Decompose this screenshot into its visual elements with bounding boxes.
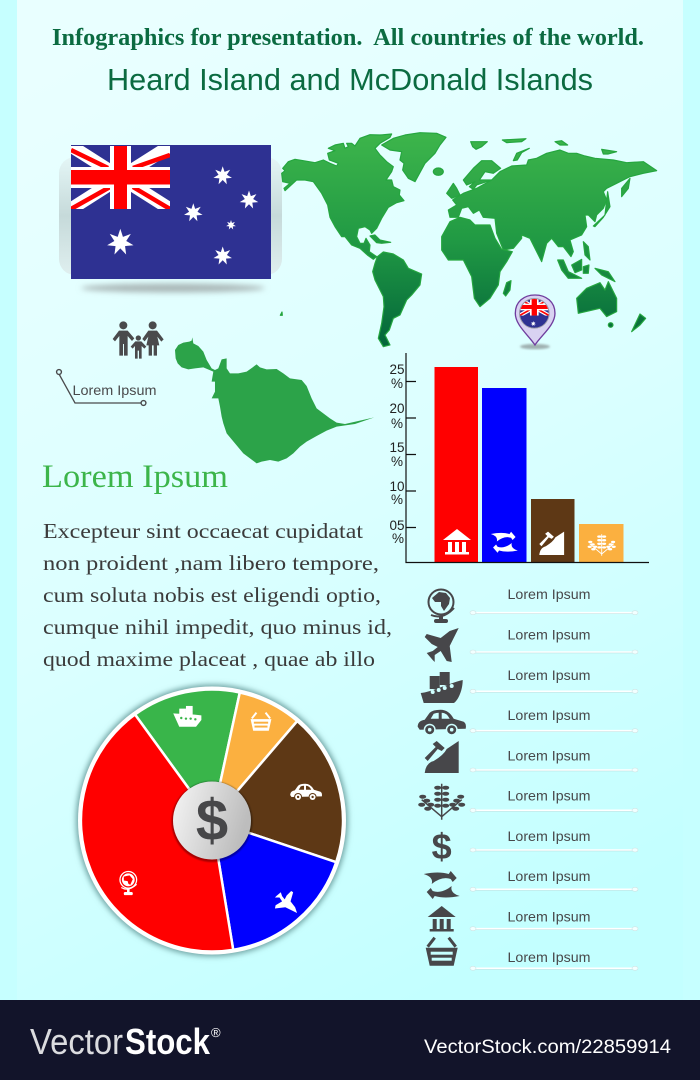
stars <box>107 166 258 265</box>
location pin <box>515 295 555 349</box>
axis labels: % <box>391 492 403 507</box>
title: tagline: Infographics for presentation. All countries of the world. <box>52 25 644 51</box>
legend row: mining: Lorem Ipsum <box>508 748 590 764</box>
axis labels: % <box>392 531 404 546</box>
icon: basket on slice <box>251 713 271 731</box>
legend row: car <box>418 708 638 736</box>
icon: arrows on bar <box>491 532 518 553</box>
logo: Stock <box>125 1021 211 1062</box>
title: territory name: Heard Island and McDonald Islands <box>107 62 593 97</box>
icon: car on slice <box>290 784 322 801</box>
legend row: exchange arrows: Lorem Ipsum <box>508 869 590 884</box>
icon: bank on bar <box>443 529 471 554</box>
axis labels: 25 <box>389 362 405 377</box>
family icon <box>113 321 164 359</box>
icon: ship on slice <box>173 706 201 727</box>
legend row: wheat <box>418 784 638 820</box>
world map <box>280 133 657 347</box>
watermark footer <box>0 1000 700 1080</box>
bar chart <box>389 353 649 562</box>
legend row: basket: Lorem Ipsum <box>508 950 590 965</box>
callout label <box>57 370 156 405</box>
axis labels: % <box>391 416 403 431</box>
the Americas and Greenland <box>280 133 446 347</box>
legend row: trade globe: Lorem Ipsum <box>508 587 590 602</box>
legend row: trade globe <box>428 587 638 623</box>
axes and ticks <box>406 353 649 562</box>
axis labels: 15 <box>389 440 405 455</box>
legend row: bank <box>428 906 638 932</box>
legend row: car: Lorem Ipsum <box>508 708 590 723</box>
flag of Australia <box>59 145 282 292</box>
legend row: bank: Lorem Ipsum <box>508 910 590 924</box>
axis labels: 05 <box>389 518 405 533</box>
image id: VectorStock.com/22859914 <box>424 1037 671 1058</box>
pie chart <box>76 684 348 956</box>
legend row: mining <box>425 741 638 773</box>
body text: quod maxime placeat , quae ab illo <box>43 647 375 671</box>
body text <box>43 519 392 671</box>
legend row: dollar: Lorem Ipsum <box>508 829 590 844</box>
axis labels <box>389 362 405 546</box>
legend row: dollar <box>432 826 638 867</box>
hub with dollar <box>172 781 252 862</box>
axis labels: 10 <box>389 479 405 494</box>
logo: Vector <box>30 1021 123 1062</box>
axis labels: 20 <box>389 401 405 416</box>
Eurasia <box>447 139 657 262</box>
body text: cumque nihil impedit, quo minus id, <box>43 615 392 639</box>
legend row: plane <box>425 628 638 662</box>
legend row: exchange arrows <box>424 869 638 899</box>
logo: ® <box>211 1025 221 1040</box>
body text: Excepteur sint occaecat cupidatat <box>43 519 363 543</box>
body text: non proident ,nam libero tempore, <box>43 551 379 575</box>
legend row: basket <box>426 938 638 970</box>
pie slices <box>81 690 343 952</box>
Africa, Australia and the islands <box>442 217 646 332</box>
legend row: ship: Lorem Ipsum <box>508 668 590 683</box>
axis labels: % <box>391 454 403 469</box>
legend row: ship <box>421 668 638 703</box>
body text: cum soluta nobis est eligendi optio, <box>43 583 381 607</box>
island map <box>175 337 374 463</box>
legend list <box>418 587 638 970</box>
icon: mining on bar <box>539 532 564 555</box>
axis labels: % <box>391 376 403 391</box>
icon: globe on slice <box>120 871 137 895</box>
legend row: dollar: $ <box>432 826 452 867</box>
icon: plane on slice <box>275 891 297 913</box>
heading: Lorem Ipsum <box>42 459 228 495</box>
legend row: plane: Lorem Ipsum <box>508 628 590 642</box>
legend row: wheat: Lorem Ipsum <box>508 788 590 804</box>
logo <box>30 1021 221 1062</box>
callout label: Lorem Ipsum <box>72 383 156 398</box>
bars <box>434 367 624 562</box>
hub with dollar: $ <box>196 788 228 853</box>
icon: wheat on bar <box>588 534 616 556</box>
